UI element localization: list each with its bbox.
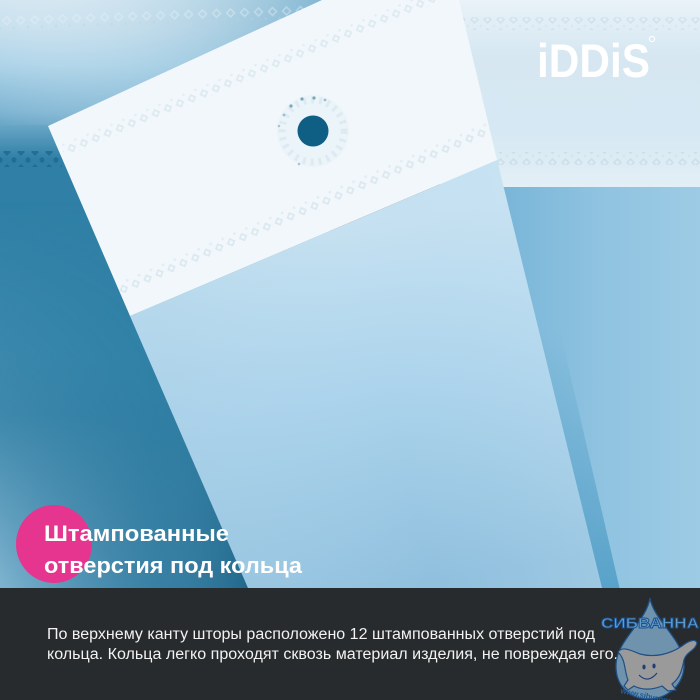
- text block: description: [47, 626, 618, 663]
- icon: water drop with bathtub: [616, 598, 697, 699]
- background: left curtain fabric: [0, 0, 330, 590]
- text block: description: кольца. Кольца легко проходят сквозь материал изделия, не повреждая его.: [47, 646, 618, 663]
- panel: dark footer: [0, 588, 700, 700]
- watermark name: СИБВАННА: [601, 615, 699, 632]
- pink circle accent: [16, 505, 92, 583]
- heading: [44, 521, 302, 578]
- panel: folded curtain strip, blue lower part: [130, 160, 602, 588]
- panel: white reinforced top hem: [48, 0, 498, 316]
- watermark: Sibvanna drop logo: [601, 598, 699, 700]
- logo: IDDIS: iDDiS: [537, 34, 650, 87]
- text block: description: По верхнему канту шторы расположено 12 штампованных отверстий под: [47, 626, 595, 643]
- background: right curtain fabric: [440, 0, 700, 590]
- heading: Штампованные: [44, 521, 229, 546]
- icon: stamped hole with ring of embossed dots: [277, 95, 349, 167]
- heading: отверстия под кольца: [44, 553, 302, 578]
